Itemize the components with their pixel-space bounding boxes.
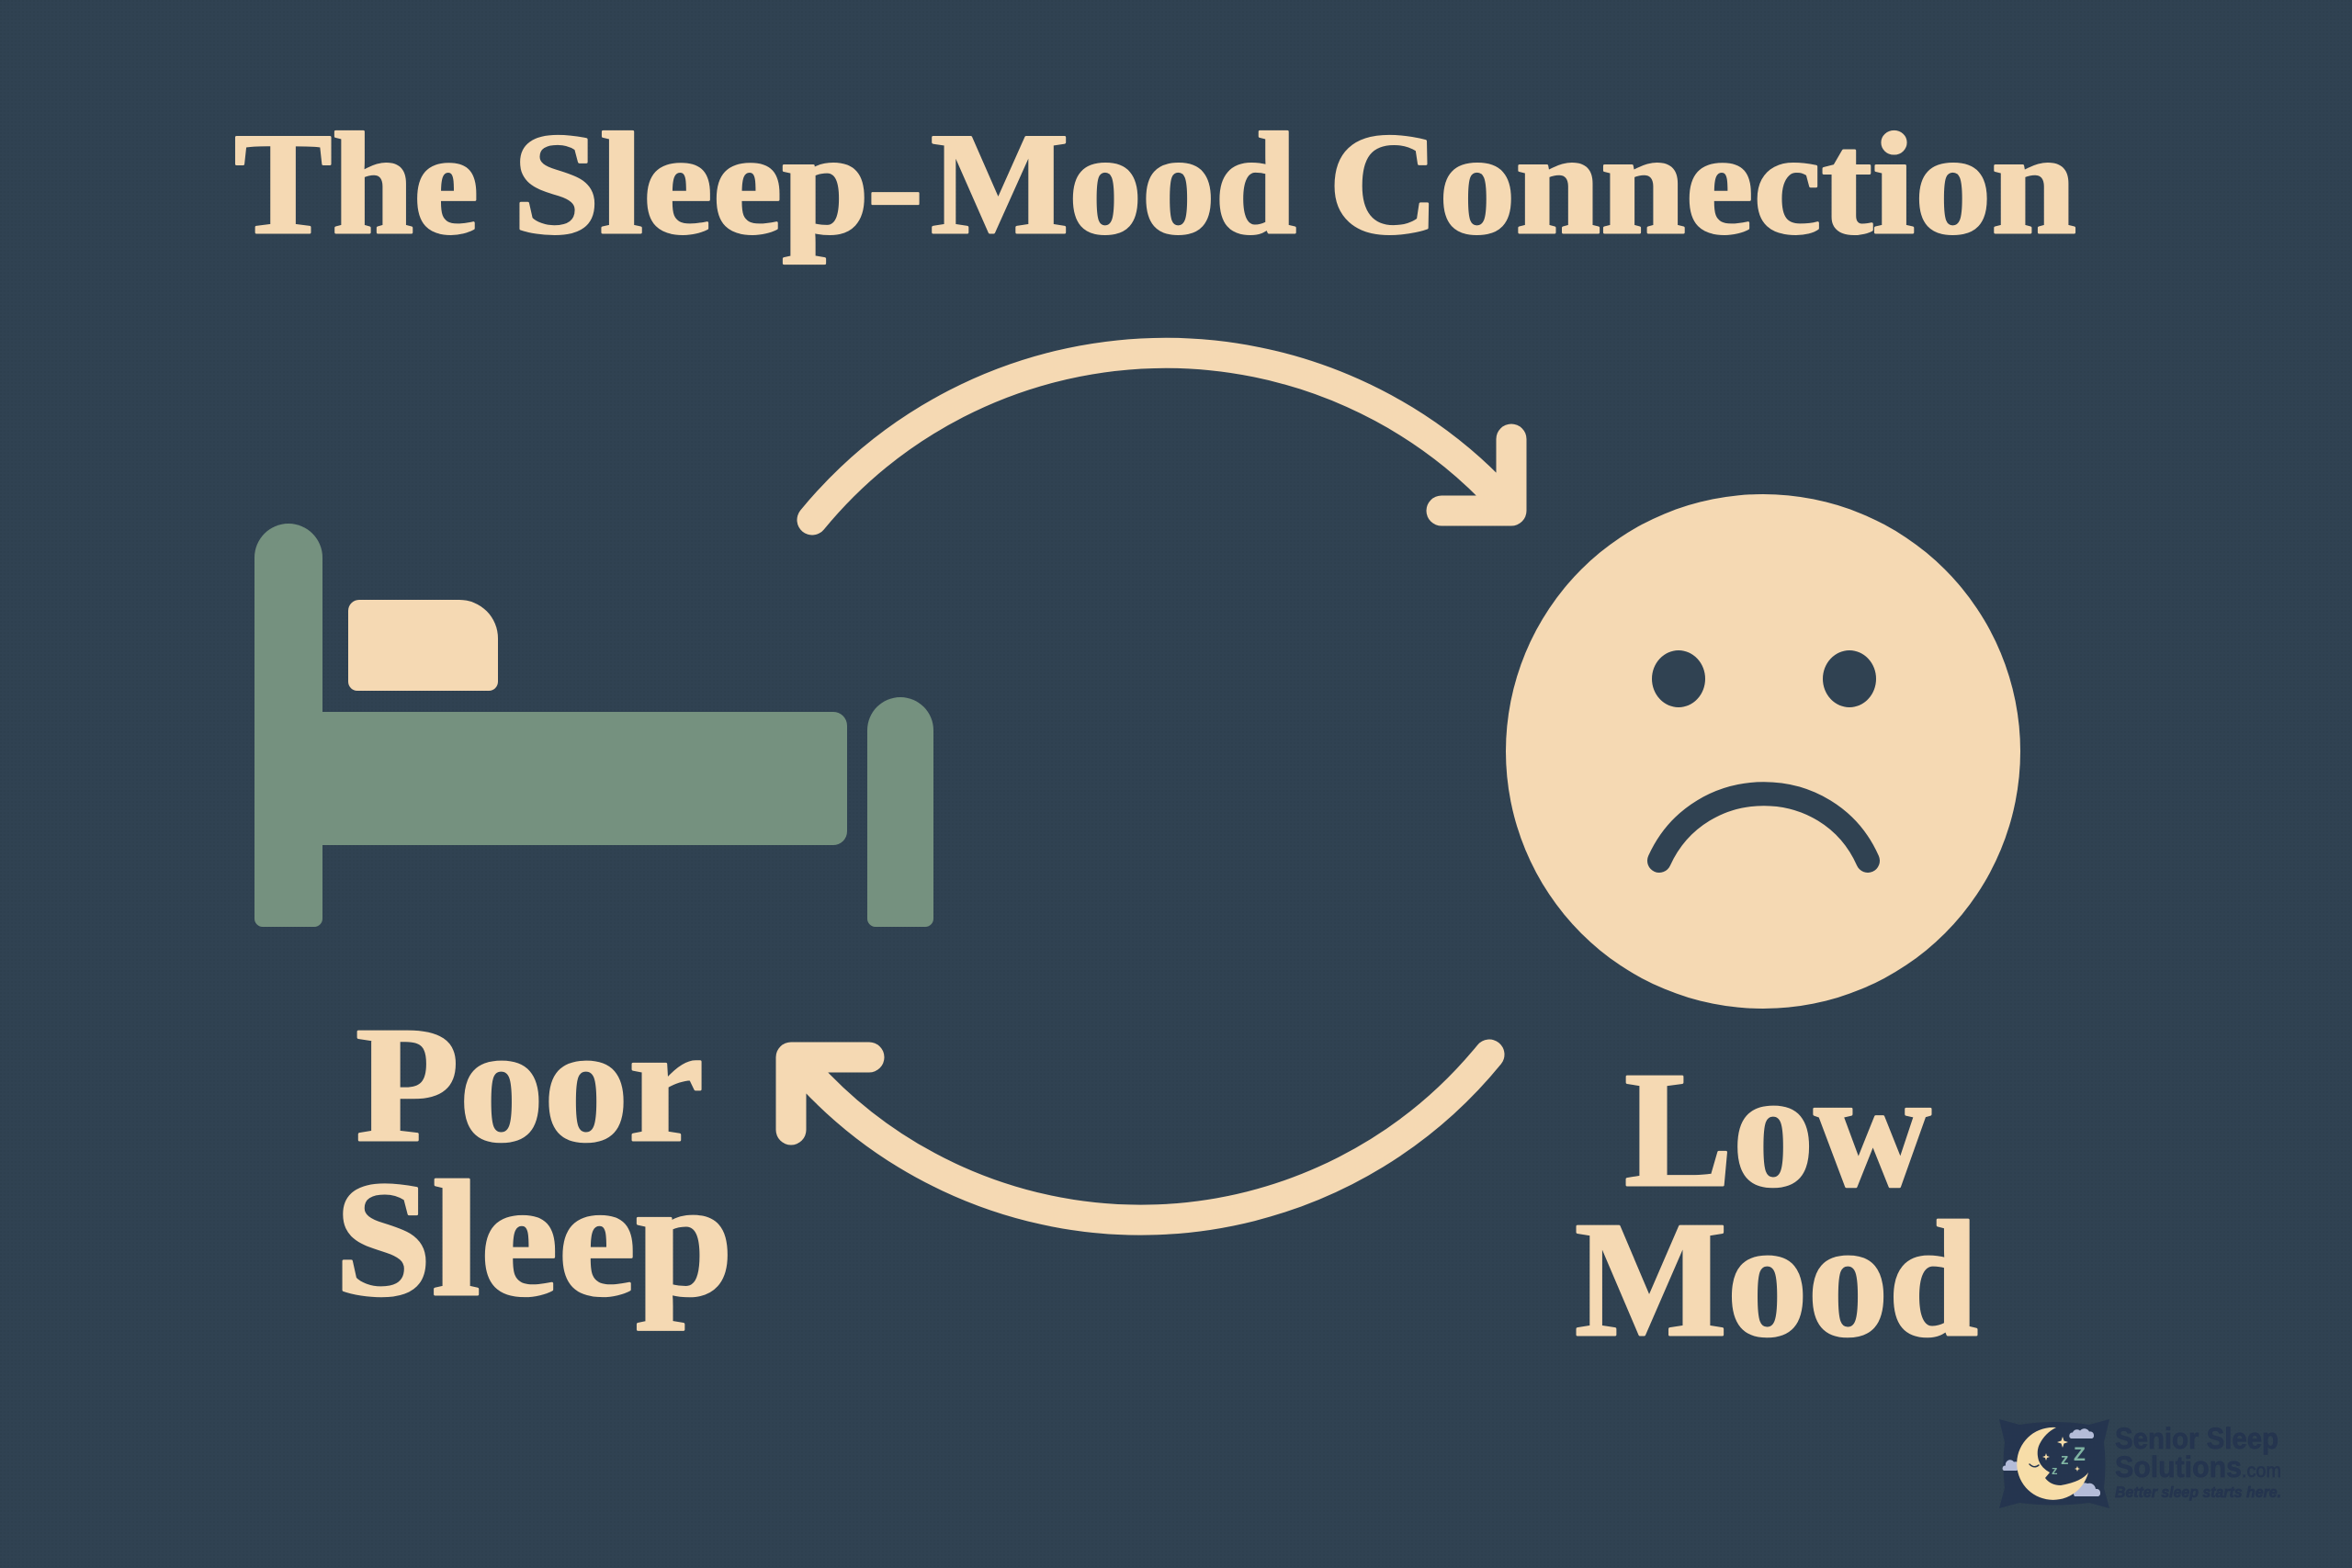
logo crescent moon (2017, 1427, 2088, 1500)
arrow: low mood to poor sleep (791, 1055, 1489, 1220)
logo z letters: z (2061, 1450, 2069, 1468)
title: Sleep (513, 104, 869, 265)
bed headboard (254, 524, 322, 927)
logo clouds (2003, 1428, 2100, 1496)
label: poor sleep: Sleep (334, 1147, 733, 1330)
bed footboard (867, 697, 933, 927)
logo z letters: Z (2074, 1444, 2086, 1465)
right eye (1823, 650, 1876, 707)
label: low mood (1575, 1038, 1978, 1371)
arrow: poor sleep to low mood (812, 353, 1511, 520)
icon: bed (254, 524, 933, 927)
logo stars (2042, 1437, 2080, 1472)
logo z letters (2052, 1444, 2086, 1477)
title: – (872, 104, 919, 265)
title: The (234, 104, 479, 265)
icon: sad face (1506, 494, 2020, 1009)
logo domain: Solutions.com (2115, 1450, 2281, 1483)
bed pillow (348, 600, 498, 691)
left eye (1652, 650, 1705, 707)
label: poor sleep: Poor (356, 993, 704, 1176)
title (234, 104, 2076, 265)
logo z letters: z (2052, 1463, 2058, 1477)
logo pillow (1999, 1419, 2109, 1508)
frowning mouth (1659, 794, 1868, 861)
label: low mood: Mood (1575, 1188, 1978, 1371)
title: Mood (931, 104, 1296, 265)
bed mattress (312, 712, 847, 845)
label: low mood: Low (1624, 1038, 1931, 1221)
label: poor sleep (334, 993, 733, 1330)
logo: Senior Sleep Solutions (1999, 1419, 2281, 1508)
logo tagline: Better sleep starts here. (2115, 1483, 2281, 1501)
logo wordmark: Senior Sleep (2115, 1422, 2278, 1455)
logo moon sleeping eye (2030, 1464, 2039, 1467)
title: Connection (1329, 104, 2076, 265)
